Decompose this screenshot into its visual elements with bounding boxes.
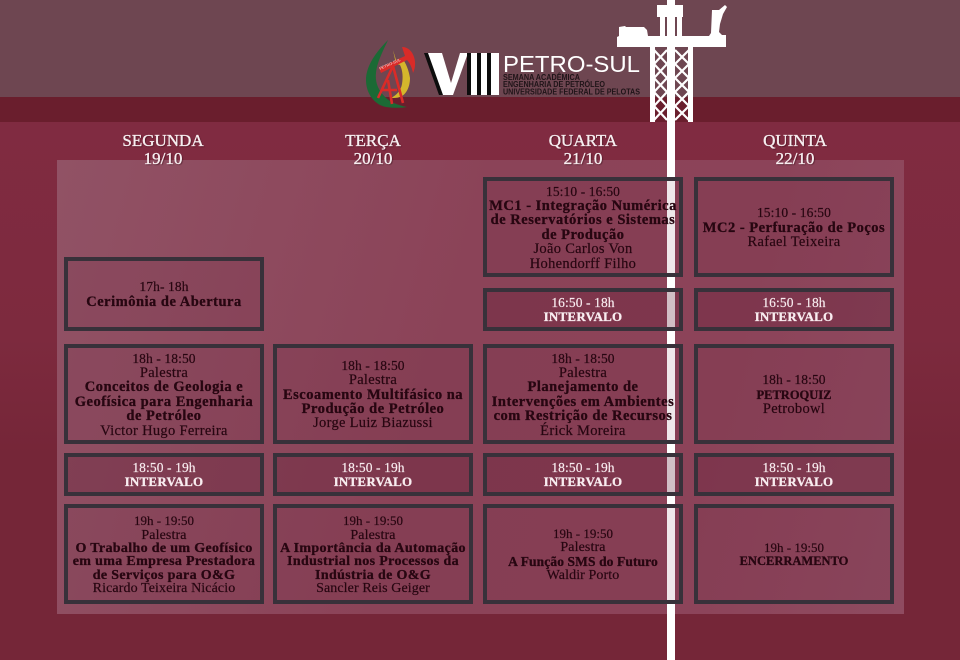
box: segunda 18h palestra <box>64 344 264 444</box>
dark ribbon band <box>0 97 960 122</box>
box: MC1: 15:10 - 16:50 <box>546 184 620 199</box>
box: quarta 19h palestra <box>483 504 683 604</box>
box: intervalo quinta 16:50: INTERVALO <box>755 309 833 324</box>
box: intervalo quinta: INTERVALO <box>755 474 833 489</box>
box: encerramento <box>694 504 894 604</box>
box: intervalo terça: 18:50 - 19h <box>341 460 405 475</box>
logo subtitle <box>503 73 641 96</box>
box: segunda 19h palestra: Palestra <box>141 528 187 543</box>
box: quarta 18h palestra: Planejamento de <box>528 379 638 395</box>
heading: quinta: QUINTA <box>763 131 827 150</box>
box: segunda 18h palestra: Geofísica para Engenharia <box>75 394 253 410</box>
box: encerramento: ENCERRAMENTO <box>740 554 848 568</box>
box: segunda 19h palestra: em uma Empresa Prestadora <box>73 554 255 569</box>
box: intervalo quarta: 18:50 - 19h <box>551 460 615 475</box>
box: segunda 19h palestra <box>64 504 264 604</box>
box: MC2: MC2 - Perfuração de Poços <box>703 220 885 236</box>
box: MC1 <box>483 177 683 277</box>
box: intervalo segunda <box>64 453 264 496</box>
box: intervalo segunda: 18:50 - 19h <box>132 460 196 475</box>
box: intervalo terça <box>273 453 473 496</box>
box: terça 19h palestra: Industrial nos Processos da <box>287 554 459 569</box>
box: MC2: Rafael Teixeira <box>747 234 840 250</box>
roman numeral VIII <box>424 53 499 95</box>
box: MC1: MC1 - Integração Numérica <box>489 198 677 214</box>
box: segunda 19h palestra: de Serviços para O&G <box>93 568 235 583</box>
box: segunda 18h palestra: Conceitos de Geologia e <box>85 379 243 395</box>
box: quarta 19h palestra: A Função SMS do Futuro <box>508 554 658 569</box>
box: segunda 18h palestra: de Petróleo <box>126 408 202 424</box>
box: encerramento: 19h - 19:50 <box>764 540 824 555</box>
box: terça 18h palestra: 18h - 18:50 <box>341 358 405 373</box>
box: terça 19h palestra: 19h - 19:50 <box>343 513 403 528</box>
heading: quarta <box>549 131 618 168</box>
heading: segunda: SEGUNDA <box>122 131 204 150</box>
box: intervalo quinta: 18:50 - 19h <box>762 460 826 475</box>
box: intervalo quinta 16:50: 16:50 - 18h <box>762 295 826 310</box>
logo wordmark: PETRO-SUL <box>503 51 640 77</box>
box: intervalo quarta: INTERVALO <box>544 474 622 489</box>
box: quinta petroquiz: Petrobowl <box>763 401 825 417</box>
box: quarta 19h palestra: Waldir Porto <box>547 568 619 583</box>
heading: terça: TERÇA <box>345 131 401 150</box>
box: terça 19h palestra: A Importância da Automação <box>280 541 466 556</box>
heading: quinta <box>763 131 828 168</box>
box: MC1: João Carlos Von <box>533 241 633 257</box>
box: quarta 18h palestra: Intervenções em Ambientes <box>492 394 674 410</box>
top header band <box>0 0 960 97</box>
box: quarta 18h palestra: Palestra <box>559 365 607 381</box>
box: MC1: de Produção <box>542 227 624 243</box>
heading: quarta: 21/10 <box>564 148 602 168</box>
box: intervalo quarta <box>483 453 683 496</box>
box: quinta petroquiz: PETROQUIZ <box>756 388 832 402</box>
box: MC2 <box>694 177 894 277</box>
box: intervalo segunda: INTERVALO <box>125 474 203 489</box>
box: segunda 18h palestra: Victor Hugo Ferreira <box>100 423 228 439</box>
heading: segunda <box>122 131 204 168</box>
box: quarta 18h palestra: com Restrição de Recursos <box>494 408 672 424</box>
box: quarta 18h palestra <box>483 344 683 444</box>
box: quarta 19h palestra: Palestra <box>560 540 606 555</box>
box: MC1: Hohendorff Filho <box>530 256 636 272</box>
box: cerimônia de abertura: 17h- 18h <box>139 279 189 294</box>
box: terça 18h palestra: Escoamento Multifásico na <box>283 387 463 403</box>
box: intervalo quarta 16:50: 16:50 - 18h <box>551 295 615 310</box>
box: segunda 18h palestra: Palestra <box>140 365 188 381</box>
heading: terça: 20/10 <box>354 148 392 168</box>
box: intervalo quinta <box>694 453 894 496</box>
logo subtitle: SEMANA ACADÊMICA <box>503 73 580 82</box>
box: cerimônia de abertura <box>64 257 264 331</box>
heading: quarta: QUARTA <box>549 131 617 150</box>
box: MC1: de Reservatórios e Sistemas <box>491 212 675 228</box>
box: quinta petroquiz: 18h - 18:50 <box>762 372 826 387</box>
box: terça 19h palestra: Sancler Reis Geiger <box>316 581 430 596</box>
box: quarta 19h palestra: 19h - 19:50 <box>553 526 613 541</box>
box: segunda 19h palestra: O Trabalho de um Geofísico <box>75 541 253 556</box>
box: quinta petroquiz <box>694 344 894 444</box>
box: segunda 18h palestra: 18h - 18:50 <box>132 351 196 366</box>
icon: green, yellow and red pump-jack emblem: PETRO-SUL <box>378 57 402 71</box>
heading: terça <box>345 131 402 168</box>
box: segunda 19h palestra: 19h - 19:50 <box>134 513 194 528</box>
box: terça 19h palestra: Indústria de O&G <box>315 568 431 583</box>
box: cerimônia de abertura: Cerimônia de Abertura <box>86 294 242 310</box>
heading: segunda: 19/10 <box>144 148 182 168</box>
box: terça 19h palestra: Palestra <box>350 528 396 543</box>
box: intervalo quarta 16:50 <box>483 288 683 331</box>
box: segunda 19h palestra: Ricardo Teixeira Nicácio <box>93 581 235 596</box>
box: terça 19h palestra <box>273 504 473 604</box>
box: intervalo terça: INTERVALO <box>334 474 412 489</box>
icon: green, yellow and red pump-jack emblem <box>366 40 415 108</box>
box: terça 18h palestra: Jorge Luiz Biazussi <box>313 415 433 431</box>
box: quarta 18h palestra: 18h - 18:50 <box>551 351 615 366</box>
box: intervalo quarta 16:50: INTERVALO <box>544 309 622 324</box>
heading: quinta: 22/10 <box>776 148 814 168</box>
box: intervalo quinta 16:50 <box>694 288 894 331</box>
box: terça 18h palestra: Produção de Petróleo <box>302 401 444 417</box>
box: terça 18h palestra: Palestra <box>349 372 397 388</box>
event logo <box>366 40 641 108</box>
box: terça 18h palestra <box>273 344 473 444</box>
translucent schedule panel <box>57 160 904 614</box>
box: MC2: 15:10 - 16:50 <box>757 205 831 220</box>
box: quarta 18h palestra: Érick Moreira <box>540 423 626 439</box>
logo subtitle: ENGENHARIA DE PETRÓLEO <box>503 80 605 89</box>
